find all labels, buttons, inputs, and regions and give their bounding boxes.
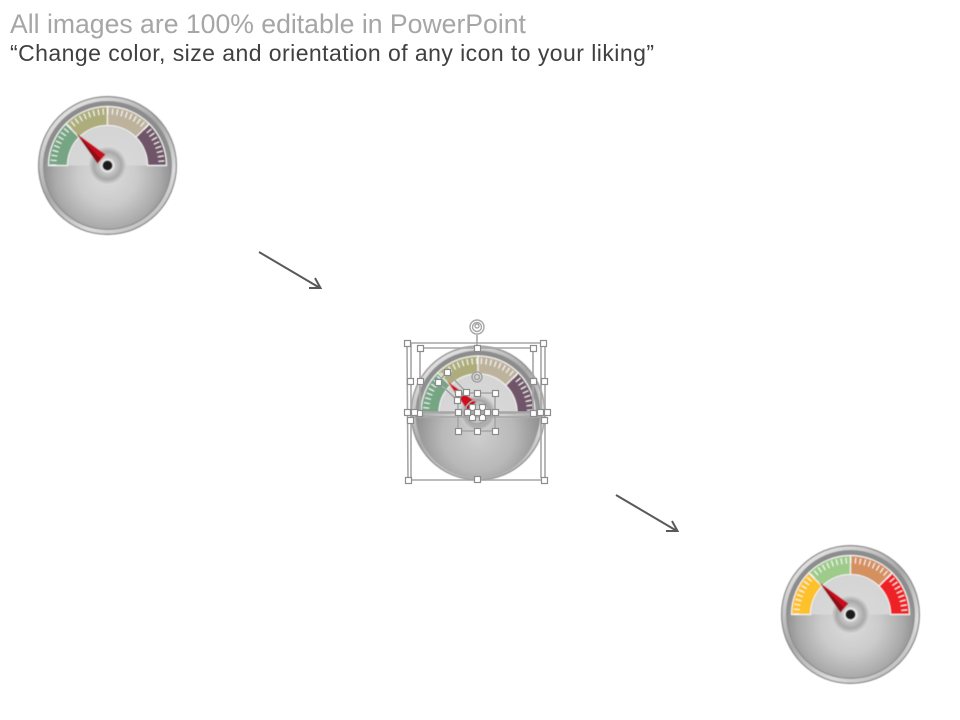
subtitle: “Change color, size and orientation of any icon to your liking” [10,40,654,66]
arrow: first to second gauge [259,252,320,288]
gauge: selected with editing handles [404,320,550,484]
needle [76,134,106,164]
gauge: muted colours top left [38,96,177,235]
selection handles [404,340,550,484]
needle [820,582,848,612]
gauge scale segments [792,556,910,614]
title: All images are 100% editable in PowerPoint [10,9,527,39]
gauge: bright colours bottom right [781,545,920,684]
gauge scale segments [48,106,166,166]
gauge body [410,346,546,480]
arrow: second to third gauge [616,495,678,531]
rotation handle [470,320,484,334]
selection frames [407,335,547,480]
needle pivot [100,158,114,172]
needle pivot [844,608,858,622]
